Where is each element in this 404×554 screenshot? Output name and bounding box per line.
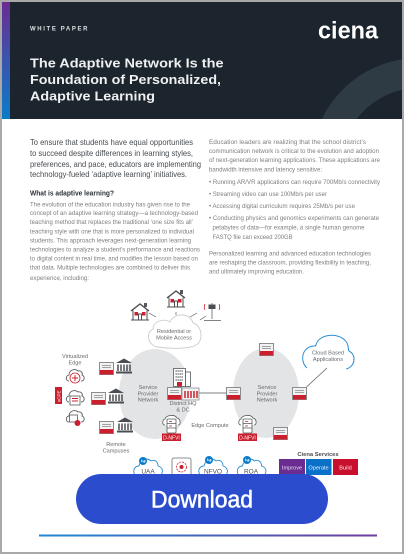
- icon: d-nfvi right: [238, 415, 257, 441]
- intro paragraph: To ensure that students have equal opportunities: [30, 138, 193, 147]
- label: service provider left: Service: [139, 385, 157, 391]
- legend: ciena services: [279, 452, 358, 475]
- legend: ciena services: Build: [339, 466, 352, 472]
- label: virtualized edge: [62, 354, 88, 366]
- body text: right column: bandwidth intensive and latency sensitive:: [209, 166, 322, 173]
- ellipse: left service provider network: [119, 349, 191, 439]
- body text: right column: communication network is critical to the evolution and adoption: [209, 148, 379, 155]
- title: Foundation of Personalized,: [30, 72, 221, 87]
- intro paragraph: technology-fueled ‘adaptive learning’ initiatives.: [30, 170, 187, 179]
- title: [30, 56, 223, 104]
- label: remote campuses: Remote: [106, 442, 126, 448]
- body text: left column: The evolution of the education industry has given rise to the: [30, 201, 190, 208]
- ellipse: right service provider network: [233, 348, 299, 438]
- bullet list: • Running AR/VR applications can require 700Mb/s connectivity: [209, 179, 381, 186]
- intro paragraph: to succeed despite differences in learning styles,: [30, 149, 193, 158]
- label: district hq: & DC: [176, 408, 190, 414]
- cloud: roa: ROA: [244, 468, 259, 476]
- body text: left column: teaching style with one that is more personalized to individual: [30, 228, 194, 235]
- body text: right column: and ultimately improving education.: [209, 268, 304, 275]
- cloud: uaa: UAA: [141, 468, 155, 476]
- label: service provider right: Provider: [257, 391, 278, 397]
- label: service provider left: Network: [138, 398, 158, 404]
- subheading: What is adaptive learning?: [30, 190, 114, 198]
- label: virtualized edge: Edge: [68, 360, 82, 366]
- body text: left column: to digital content in real time, and modifies the lesson based on: [30, 255, 198, 262]
- cloud: residential or mobile access: [148, 315, 201, 348]
- legend: ciena services: Ciena Services: [297, 452, 339, 458]
- icon: d-nfvi left: [162, 415, 181, 441]
- logo: ciena: ciena: [318, 18, 379, 44]
- icon: district headquarters: [174, 368, 199, 400]
- decorative arc: [322, 60, 402, 119]
- legend: ciena services: Improve: [282, 466, 302, 472]
- label: service provider right: Service: [258, 385, 276, 391]
- title: The Adaptive Network Is the: [30, 56, 223, 70]
- bullet list: • Accessing digital curriculum requires 25Mb/s per use: [209, 203, 355, 210]
- connector lines: [149, 312, 327, 393]
- icons: virtual edge clouds: [66, 370, 84, 426]
- bullet list: • Streaming video can use 100Mb/s per user: [209, 191, 327, 198]
- body text: left column: experience, including:: [30, 275, 89, 282]
- icon: cell tower: [204, 303, 221, 320]
- intro paragraph: [30, 138, 201, 179]
- routers: [92, 344, 306, 440]
- eyebrow label: WHITE PAPER: [30, 26, 88, 32]
- body text: left column: technologies to analyze a student’s performance and reactions: [30, 246, 200, 253]
- label: remote campuses: Campuses: [103, 449, 130, 455]
- label: service provider right: Network: [257, 398, 277, 404]
- body text: left column: concept of an adaptive learning strategy—a technology-based: [30, 210, 198, 217]
- tag: vertical red label: [55, 387, 62, 404]
- body text: right column: Personalized learning and advanced education technologies: [209, 250, 371, 257]
- body text: right column: [209, 139, 381, 275]
- bullet list: • Conducting physics and genomics experiments can generate: [209, 215, 379, 222]
- cloud: uaa: [134, 457, 162, 476]
- cloud: roa: [237, 456, 266, 476]
- icon: house left: [131, 303, 149, 320]
- cloud: nfvo: [199, 456, 227, 476]
- bullet list: FASTQ file can exceed 200GB: [212, 234, 292, 241]
- cloud: residential or mobile access: Mobile Access: [156, 336, 192, 342]
- intro paragraph: preferences, and pace, educators are implementing: [30, 160, 201, 169]
- title: Adaptive Learning: [30, 88, 155, 104]
- body text: left column: that data. Multiple technologies are combined to deliver this: [30, 264, 190, 271]
- label: district hq: [169, 401, 197, 414]
- bullet list: [209, 179, 381, 241]
- download button: [76, 474, 328, 524]
- cloud: nfvo: NFVO: [204, 468, 222, 476]
- legend: ciena services: Operate: [308, 466, 329, 472]
- icon: orchestration box: [172, 458, 191, 477]
- cloud: cloud based applications: [303, 335, 354, 369]
- body text: right column: of next-generation learning applications. These applications are: [209, 157, 380, 164]
- cloud: residential or mobile access: Residential or: [157, 329, 191, 335]
- cloud: cloud based applications: Applications: [313, 357, 343, 363]
- download button: Download: [151, 486, 253, 514]
- icons: campus buildings: [108, 358, 133, 432]
- icon: house top: [167, 290, 185, 307]
- label: remote campuses: [103, 442, 130, 455]
- body text: right column: Education leaders are realizing that the school district’s: [209, 139, 366, 146]
- body text: left column: teaching method that replaces the traditional ‘one size fits all’: [30, 219, 194, 226]
- network diagram: [55, 290, 358, 477]
- body text: left column: [30, 201, 200, 282]
- body text: right column: are reshaping the classroom, providing flexibility in teaching,: [209, 259, 371, 266]
- header banner: [2, 2, 402, 119]
- label: virtualized edge: Virtualized: [62, 354, 88, 360]
- label: service provider right: [257, 385, 278, 404]
- footer gradient rule: [39, 534, 377, 536]
- body text: left column: students. This approach leverages next-generation learning: [30, 238, 191, 244]
- label: service provider left: [138, 385, 159, 404]
- tag: vertical red label: vCPE: [56, 390, 62, 402]
- gradient stripe: [2, 2, 10, 119]
- label: service provider left: Provider: [138, 391, 159, 397]
- label: district hq: District HQ: [169, 401, 197, 407]
- label: edge compute: Edge Compute: [191, 423, 229, 429]
- cloud: cloud based applications: Cloud Based: [312, 350, 344, 356]
- bullet list: petabytes of data—for example, a single human genome: [212, 224, 365, 231]
